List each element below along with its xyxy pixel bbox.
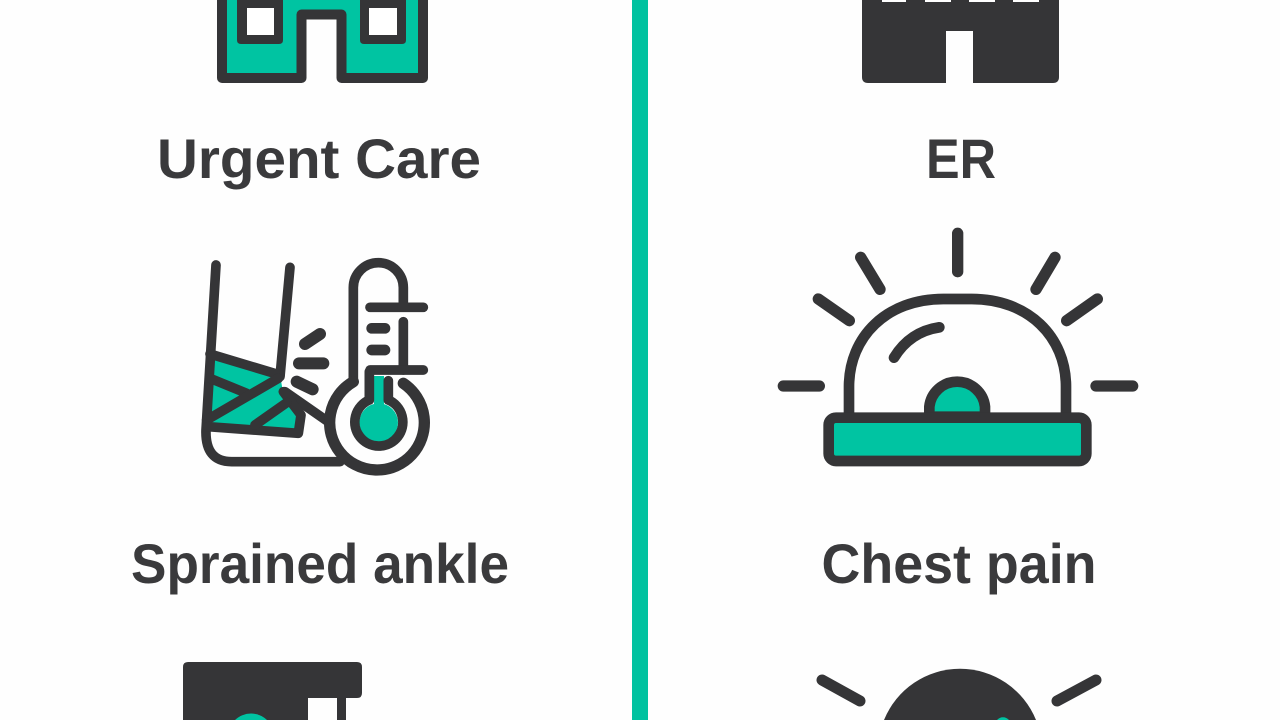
center divider <box>632 0 648 720</box>
icon: urgent care bottom item (cropped) <box>183 662 362 720</box>
heading: ER: ER <box>926 127 996 190</box>
icon: emergency siren <box>783 233 1133 461</box>
icon: sprained ankle with thermometer <box>206 263 424 470</box>
icon: ER building <box>862 0 1059 83</box>
heading: Urgent Care: Urgent Care <box>157 127 481 190</box>
icon: ER bottom item (cropped) <box>822 669 1096 720</box>
text: Sprained ankle: Sprained ankle <box>131 532 509 595</box>
text: Chest pain: Chest pain <box>822 532 1096 595</box>
icon: urgent care building <box>222 0 423 78</box>
